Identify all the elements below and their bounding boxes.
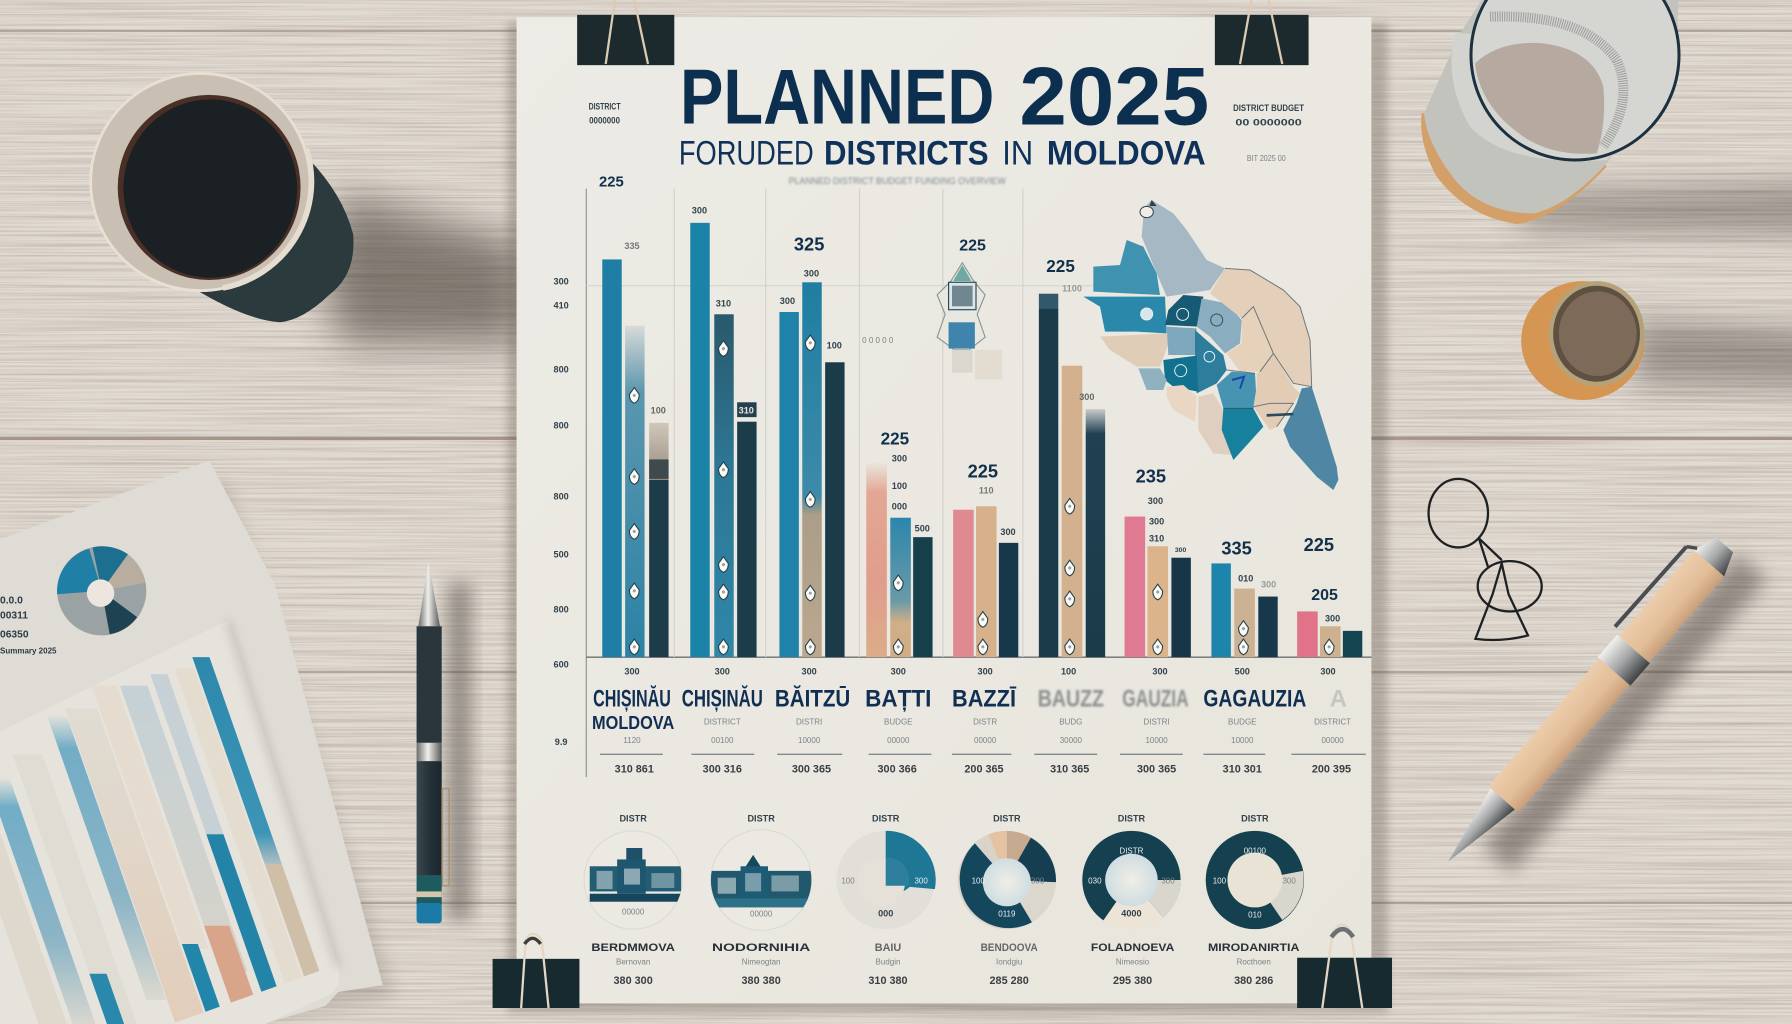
bar value labels: 310 (1149, 534, 1164, 544)
circle 3: donut: 000 (878, 909, 893, 919)
bars: Bazzi group (953, 506, 1018, 657)
bars: group 6 (1039, 294, 1105, 657)
district names: GAUZIA (1122, 685, 1189, 712)
header note right: 00 0000000 (1235, 118, 1302, 128)
bottom captions: 285 280 (990, 975, 1029, 987)
binder clip bottom left (493, 934, 579, 1008)
district details and baseline values: 200 395 (1312, 764, 1351, 776)
bar value labels: 225 (1046, 256, 1075, 276)
map of Moldova (1083, 200, 1338, 490)
subtitle: FORUDED (679, 135, 814, 173)
circle 5: donut (1082, 814, 1181, 930)
amber cork object (1521, 281, 1645, 400)
document small text: 0.0.0 (0, 595, 23, 606)
district details and baseline values: 310 301 (1223, 764, 1262, 776)
district details and baseline values: 00000 (974, 736, 997, 745)
district names: BĂITZŪ (775, 684, 850, 712)
y axis labels: 500 (554, 550, 569, 560)
district details and baseline values: 300 (978, 666, 993, 676)
bottom captions: FOLADNOEVA (1091, 942, 1174, 954)
bottom captions: MIRODANIRTIA (1208, 942, 1300, 954)
document slanted bars (0, 657, 344, 1024)
header note right (1233, 103, 1304, 163)
bar value labels: 225 (599, 174, 624, 190)
circle 5: donut: DISTR (1119, 847, 1144, 856)
district details and baseline values: 10000 (1145, 736, 1168, 745)
circle 1: building: DISTR (619, 814, 647, 824)
bar value labels: 300 (1325, 614, 1340, 624)
district details and baseline values: DISTR (973, 718, 997, 727)
circle 4: donut: DISTR (993, 814, 1021, 824)
bars: Baiti group (866, 463, 933, 657)
district details and baseline values: DISTRICT (704, 718, 741, 727)
y axis labels: 410 (554, 301, 569, 311)
y axis labels: 800 (554, 421, 569, 431)
bar value labels: 000 (892, 502, 907, 512)
binder clip top left (577, 0, 674, 65)
district details and baseline values: 200 365 (964, 764, 1004, 776)
district details and baseline values: 300 366 (878, 764, 917, 776)
y axis labels: 800 (554, 365, 569, 375)
circle 6: donut (1206, 814, 1304, 929)
district details and baseline values: DISTRI (1143, 718, 1170, 727)
bar value labels: 300 (1148, 496, 1163, 506)
bottom captions: 380 380 (742, 975, 781, 987)
bar value labels: 110 (979, 486, 994, 496)
district names: GAGAUZIA (1203, 685, 1306, 712)
district details and baseline values: 300 (802, 666, 817, 676)
y axis labels: 9.9 (555, 737, 567, 747)
header note right: DISTRICT BUDGET (1233, 103, 1304, 113)
circle 5: donut: 030 (1088, 876, 1102, 885)
bar value labels: 225 (959, 237, 986, 254)
circle 6: donut: DISTR (1241, 814, 1269, 824)
circle 1: building (584, 814, 682, 929)
bar value labels: 300 (1079, 392, 1094, 402)
bottom captions: 310 380 (868, 975, 908, 987)
bar value labels: 300 (892, 454, 907, 464)
document small text: 06350 (0, 630, 29, 641)
subtitle: MOLDOVA (1047, 135, 1206, 173)
bar value labels: 300 (804, 269, 819, 279)
circle 5: donut: 300 (1161, 876, 1175, 885)
circle 3: donut: 300 (914, 876, 928, 885)
district details and baseline values: 300 (624, 666, 640, 676)
district details and baseline values: 300 316 (703, 764, 742, 776)
bottom captions: BAIU (875, 942, 901, 954)
bottom captions: 380 286 (1234, 975, 1273, 987)
bottom captions: BERDMMOVA (591, 942, 675, 954)
dark bar chips: 310 (739, 406, 754, 416)
district details and baseline values: 10000 (1231, 736, 1254, 745)
bar value labels: 225 (881, 429, 910, 449)
circle 3: donut: 100 (841, 876, 855, 885)
bottom captions: 295 380 (1113, 975, 1152, 987)
bottom captions: Nimeosio (1116, 958, 1150, 967)
small emblem illustration: 0 0 0 0 0 (862, 336, 894, 345)
bar value labels: 235 (1136, 465, 1166, 486)
wooden ballpoint pen (1426, 524, 1767, 898)
bar markers (629, 335, 1334, 655)
district details and baseline values: 00100 (711, 736, 734, 745)
small emblem illustration (862, 263, 1002, 379)
district details and baseline values: 310 861 (615, 764, 654, 776)
bar chart (602, 223, 1362, 657)
bar value labels: 300 (1000, 527, 1016, 537)
header note left (589, 102, 621, 125)
title: 2025 (1019, 52, 1209, 143)
document small text (0, 595, 57, 656)
bar value labels: 300 (1149, 517, 1164, 527)
district details and baseline values: 300 (1320, 666, 1336, 676)
bars: group 7 (1125, 517, 1191, 657)
district names: CHIȘINĂU (682, 684, 763, 712)
bottom captions: BENDOOVA (981, 942, 1038, 954)
cork shadow on desk (1634, 320, 1792, 389)
bar value labels: 300 (1175, 547, 1186, 554)
bottom captions: Bernovan (616, 958, 650, 967)
district details and baseline values: 310 365 (1050, 764, 1089, 776)
bar value labels: 335 (1221, 537, 1252, 558)
bar value labels: 500 (915, 523, 930, 533)
bottom captions: Iondgiu (996, 958, 1022, 967)
district details and baseline values: 100 (1061, 666, 1076, 676)
bar value labels: 300 (692, 206, 707, 216)
bar value labels: 225 (1304, 534, 1334, 555)
bottom captions: 380 300 (614, 975, 653, 987)
district details and baseline values: DISTRICT (1314, 718, 1351, 727)
circle 4: donut (958, 814, 1056, 929)
bar value labels: 300 (1261, 579, 1276, 589)
y axis labels (554, 277, 569, 747)
bottom captions (591, 942, 1300, 987)
bar value labels: 325 (794, 233, 824, 254)
document small text: 00311 (0, 610, 28, 621)
bar value labels: 100 (651, 406, 666, 416)
coffee cup (91, 73, 526, 343)
subtitle: IN (1002, 135, 1033, 173)
small pie chart on document (57, 546, 146, 635)
district details and baseline values: 300 365 (792, 764, 831, 776)
bars: Baitzu group (779, 282, 845, 657)
district names: BAȚTI (865, 685, 931, 712)
bottom captions: NODORNIHIA (712, 942, 811, 954)
y axis labels: 800 (554, 605, 569, 615)
circle 4: donut: 0119 (998, 910, 1016, 919)
district details and baseline values: DISTRI (796, 718, 822, 727)
y axis labels: 300 (554, 277, 569, 287)
title (680, 52, 1209, 143)
district details and baseline values: 300 (715, 666, 730, 676)
blurred caption: PLANNED DISTRICT BUDGET FUNDING OVERVIEW (789, 176, 1006, 186)
bar value labels: 310 (716, 298, 731, 308)
glass shadow on desk (1520, 183, 1792, 234)
district details and baseline values: 00000 (1321, 736, 1344, 745)
circle 6: donut: 00100 (1244, 847, 1267, 856)
district names (592, 684, 1347, 733)
district details and baseline values: 1120 (623, 736, 641, 745)
bar value labels: 100 (827, 341, 842, 351)
bar value labels: 225 (968, 461, 998, 482)
header note left: DISTRICT (589, 102, 621, 112)
circle 3: donut (837, 814, 936, 929)
poster sheet (507, 17, 1387, 1013)
header note right: BIT 2025 00 (1247, 154, 1286, 163)
circle 6: donut: 300 (1282, 876, 1296, 885)
district details and baseline values: 00000 (887, 736, 910, 745)
district details and baseline values: 500 (1235, 666, 1250, 676)
bar value labels: 335 (624, 241, 640, 251)
dark bar chips (649, 402, 757, 479)
wire eyeglasses (1429, 479, 1542, 640)
district details and baseline values: 10000 (798, 736, 821, 745)
bar value labels (599, 174, 1340, 624)
circle 2: building: 00000 (750, 910, 773, 919)
district details and baseline values: BUDG (1059, 718, 1082, 727)
water glass (1421, 0, 1679, 224)
district names: A (1330, 685, 1347, 712)
circle 2: building: DISTR (747, 814, 775, 824)
district details and baseline values (600, 666, 1366, 776)
subtitle: DISTRICTS (824, 135, 989, 173)
circle 1: building: 00000 (622, 907, 645, 916)
district details and baseline values: 300 (1152, 666, 1168, 676)
bottom captions: Budgin (876, 958, 900, 967)
district details and baseline values: BUDGE (884, 718, 913, 727)
circle 4: donut: 300 (1031, 876, 1045, 885)
district details and baseline values: 300 (891, 666, 906, 676)
bars: Chisinau group 2 (690, 223, 757, 657)
bar value labels: 1100 (1062, 283, 1082, 293)
bars: Gagauzia group (1211, 563, 1278, 657)
district names: MOLDOVA (592, 712, 674, 733)
bar value labels: 100 (892, 481, 907, 491)
bars: Chisinau group 1 (602, 259, 669, 657)
bars: last group (1297, 611, 1362, 657)
title: PLANNED (680, 54, 994, 140)
district names: BAZZĪ (952, 685, 1016, 712)
district details and baseline values: 30000 (1060, 736, 1083, 745)
circle 5: donut: DISTR (1118, 814, 1146, 824)
bar value labels: 010 (1238, 574, 1253, 584)
bar value labels: 205 (1311, 587, 1338, 604)
district details and baseline values: BUDGE (1228, 718, 1257, 727)
subtitle (679, 135, 1206, 173)
bottom captions: Rocthoen (1237, 958, 1271, 967)
circle 4: donut: 100 (972, 876, 986, 885)
circle 6: donut: 100 (1213, 876, 1227, 885)
circle 5: donut: 4000 (1121, 909, 1142, 919)
y axis labels: 800 (554, 491, 569, 501)
binder clip bottom right (1297, 925, 1392, 1008)
binder clip top right (1215, 0, 1309, 65)
circle 6: donut: 010 (1248, 911, 1262, 920)
black pen (417, 562, 471, 923)
document small text: Summary 2025 (0, 647, 57, 656)
header note left: 0000000 (589, 115, 620, 125)
district names: CHIȘINĂU (593, 684, 671, 712)
bottom donut row (584, 814, 1304, 930)
bar value labels: 300 (780, 296, 795, 306)
bottom captions: Nimeogtan (742, 958, 780, 967)
district names: BAUZZ (1038, 685, 1104, 712)
circle 2: building (711, 814, 811, 930)
circle 3: donut: DISTR (872, 814, 900, 824)
chart axes and grid (586, 189, 1371, 777)
left documents on desk with charts (0, 461, 394, 1024)
district details and baseline values: 300 365 (1137, 764, 1176, 776)
y axis labels: 600 (554, 659, 569, 669)
